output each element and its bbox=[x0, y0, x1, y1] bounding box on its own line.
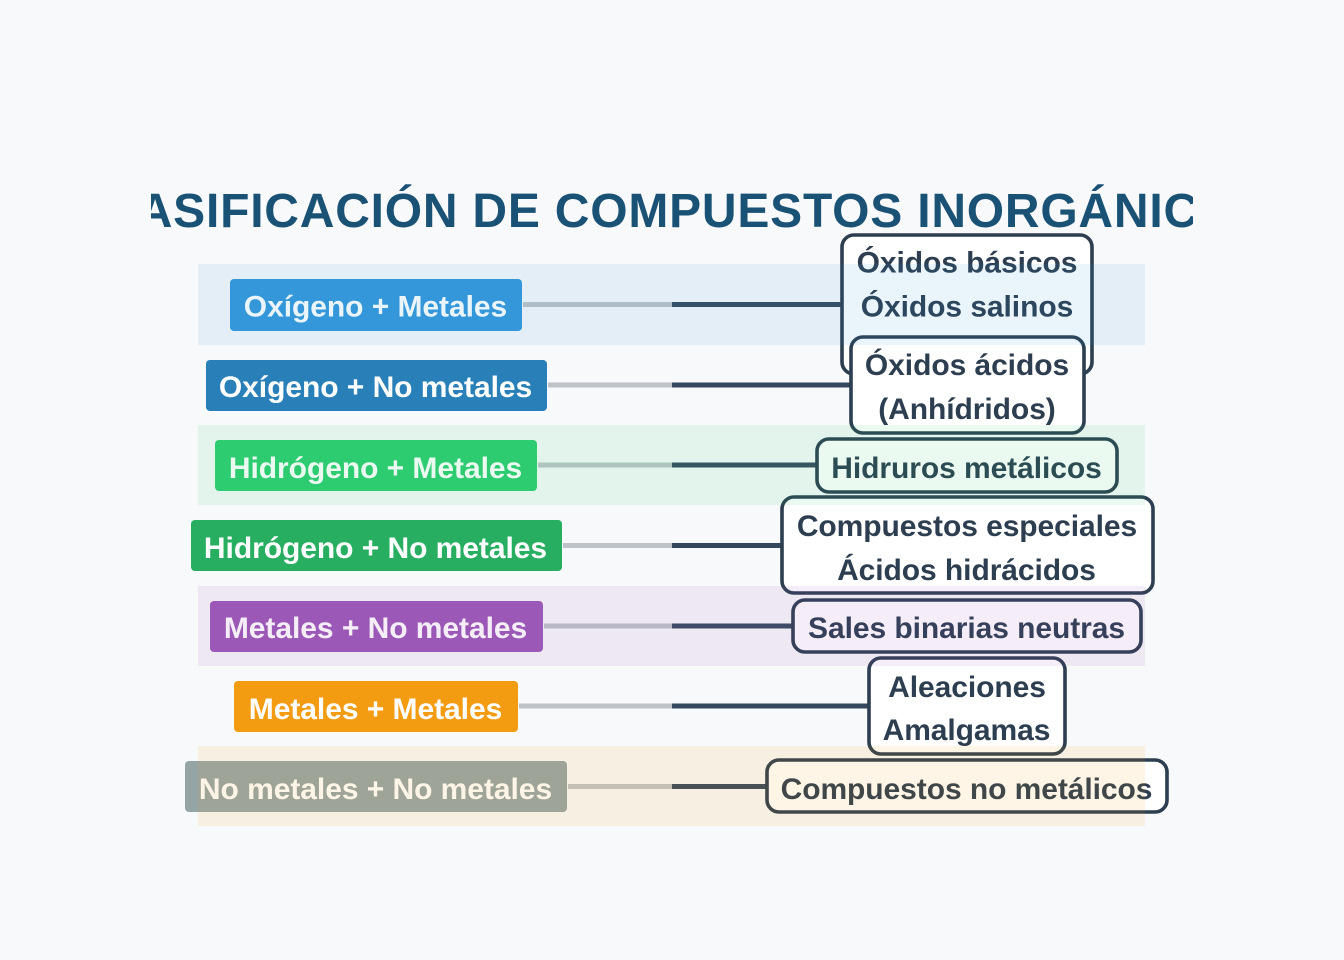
row 5: Metales + No metales: Sales binarias neutras bbox=[808, 612, 1125, 645]
row 4: Hidrógeno + No metales: Compuestos especiales bbox=[797, 510, 1137, 543]
row 3: Hidrógeno + Metales: Hidruros metálicos bbox=[831, 452, 1102, 485]
row 2: Oxígeno + No metales: Oxígeno + No metales bbox=[219, 371, 532, 404]
row 6: Metales + Metales: Metales + Metales bbox=[249, 693, 502, 726]
row 6: Metales + Metales bbox=[234, 658, 1065, 754]
row 1: Oxígeno + Metales: Oxígeno + Metales bbox=[244, 290, 507, 324]
title: CLASIFICACIÓN DE COMPUESTOS INORGÁNICOS bbox=[72, 183, 1270, 238]
band: non-metals bbox=[198, 746, 1145, 826]
band: oxygen with metals bbox=[198, 264, 1145, 345]
row 7: No metales + No metales: Compuestos no metálicos bbox=[781, 773, 1152, 806]
row 4: Hidrógeno + No metales: Ácidos hidrácidos bbox=[837, 553, 1096, 587]
row 5: Metales + No metales: Metales + No metales bbox=[224, 612, 527, 645]
row 5: Metales + No metales bbox=[210, 600, 1141, 652]
row 4: Hidrógeno + No metales bbox=[191, 497, 1153, 593]
row 2: Oxígeno + No metales: Óxidos ácidos bbox=[865, 348, 1069, 382]
row 6: Metales + Metales: Amalgamas bbox=[883, 714, 1050, 747]
row 3: Hidrógeno + Metales: Hidrógeno + Metales bbox=[229, 452, 522, 485]
band: hydrogen with metals bbox=[198, 425, 1145, 505]
row 7: No metales + No metales bbox=[185, 760, 1167, 812]
row 3: Hidrógeno + Metales bbox=[215, 439, 1117, 492]
row 2: Oxígeno + No metales bbox=[206, 337, 1084, 433]
band: metals with non-metals bbox=[198, 586, 1145, 666]
row 6: Metales + Metales: Aleaciones bbox=[888, 671, 1046, 704]
row 4: Hidrógeno + No metales: Hidrógeno + No metales bbox=[204, 532, 547, 565]
row 2: Oxígeno + No metales: (Anhídridos) bbox=[878, 393, 1056, 426]
row 7: No metales + No metales: No metales + No metales bbox=[199, 773, 552, 806]
row 1: Oxígeno + Metales: Óxidos salinos bbox=[861, 290, 1073, 324]
row 1: Oxígeno + Metales: Óxidos básicos bbox=[857, 246, 1077, 280]
row 1: Oxígeno + Metales bbox=[230, 235, 1092, 374]
